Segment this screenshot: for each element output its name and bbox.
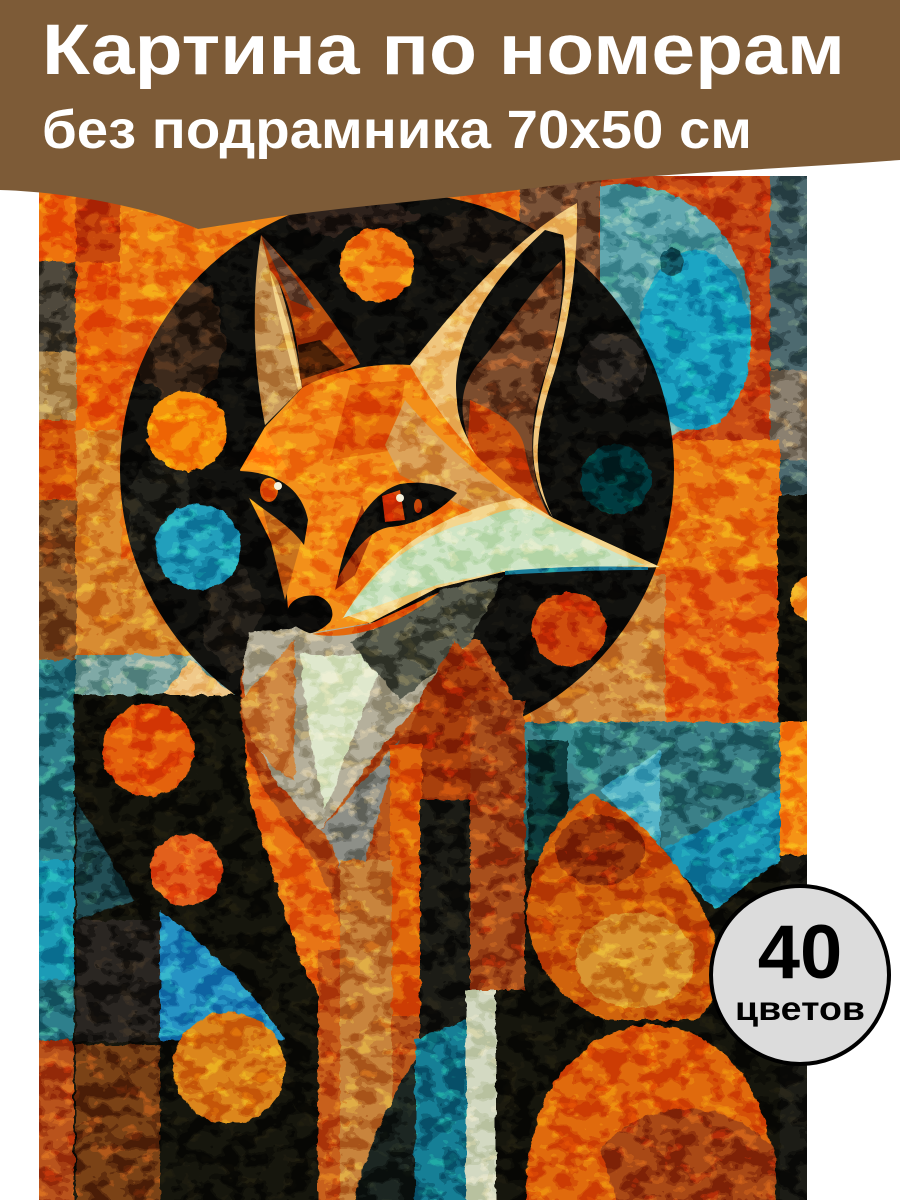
left amber circle: [147, 391, 227, 471]
fox body: [240, 576, 526, 1200]
badge label: цветов: [735, 990, 865, 1027]
left blue circle: [155, 504, 241, 590]
dark circle: [578, 333, 646, 401]
nose bridge: [335, 505, 372, 590]
orange circle lower left 2: [150, 834, 222, 906]
teal light triangle: [525, 725, 780, 910]
right ear: [410, 203, 577, 518]
subtitle: без подрамника 70х50 см: [42, 100, 752, 160]
orange circle lower left 1: [102, 704, 194, 796]
mottled forehead: [330, 380, 405, 460]
light paint texture: [39, 176, 807, 1200]
title: Картина по номерам: [42, 11, 845, 90]
large black circle: [120, 193, 674, 747]
nose: [287, 596, 332, 633]
small circles in the black disc: [147, 228, 651, 666]
white muzzle: [343, 509, 645, 618]
orange planet lower: [526, 1025, 775, 1200]
badge: 40 colours: [711, 886, 889, 1064]
right eye: [338, 483, 457, 578]
top orange circle: [340, 228, 414, 302]
amber circle lower left 3: [173, 1012, 285, 1124]
teal circle: [581, 444, 651, 514]
badge number: 40: [758, 910, 842, 995]
left ear: [255, 235, 360, 425]
teal jaw line: [505, 566, 648, 575]
left cheek triangle: [240, 427, 288, 470]
tan cheek: [385, 400, 520, 510]
orange planet upper: [527, 795, 722, 1020]
lower left face shade: [262, 505, 303, 600]
blue moon top right: [600, 184, 752, 436]
face: [240, 364, 660, 633]
header banner: [0, 0, 900, 229]
fox head: [240, 203, 660, 636]
painting background blocks: [30, 170, 834, 1200]
cream under-eye band: [345, 498, 660, 623]
left eye: [240, 471, 308, 545]
lower lip: [312, 592, 440, 636]
red-orange circle: [532, 592, 606, 666]
mottled paint texture: [39, 176, 807, 1200]
lower left dark region: [74, 695, 345, 1200]
painting: fox artwork: [30, 170, 834, 1200]
